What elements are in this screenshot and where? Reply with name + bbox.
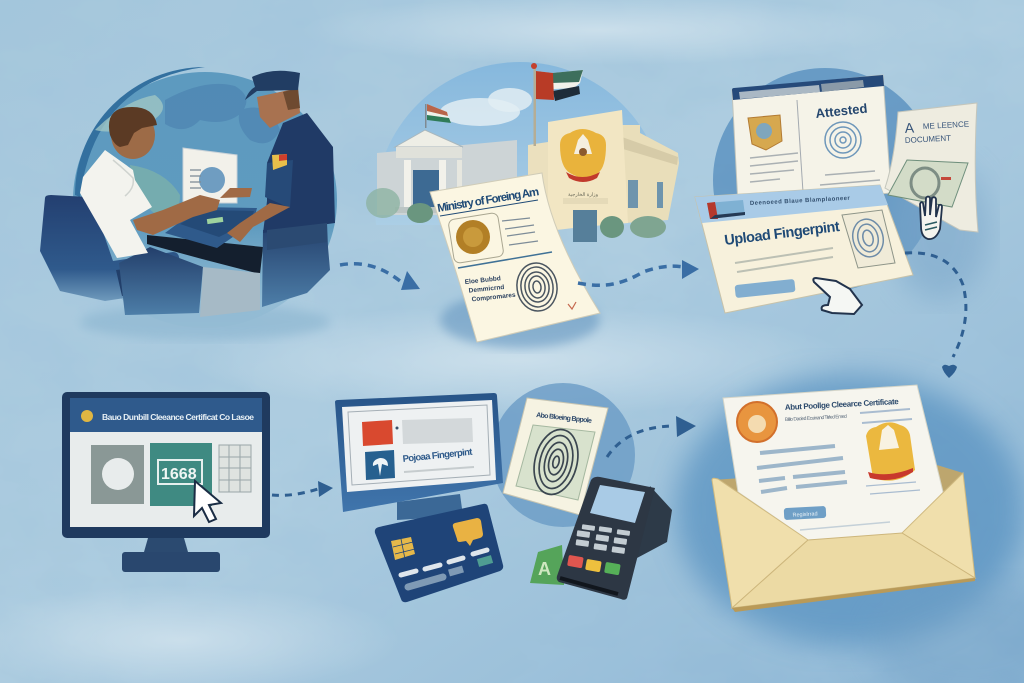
upload card: Deenoeed Blaue Blamplaoneer [750, 196, 851, 207]
orange seal [737, 402, 777, 442]
under-desk shadow [200, 267, 260, 317]
certificate: Biiilo Dacied Ecuinand Tiirled Emed [785, 414, 847, 423]
Indian flag [425, 104, 451, 128]
paper with fingerprint on stand [183, 148, 237, 203]
UAE flag and pole [531, 63, 583, 146]
envelope front [712, 473, 975, 612]
chip [391, 537, 415, 560]
seal box [448, 212, 504, 264]
fingerprint [514, 260, 560, 314]
classical building [377, 130, 517, 215]
flag [707, 200, 745, 219]
ministry building [528, 110, 679, 242]
document heading: Ministry of Foreing Am [437, 186, 540, 215]
stamp [825, 122, 861, 158]
licence document: DOCUMENT [905, 134, 951, 145]
globe backdrop [73, 67, 337, 340]
monitor stand [144, 538, 188, 552]
arrow: step 1 to step 2 [340, 264, 420, 290]
small caption: Eloe Bubbd [464, 275, 501, 286]
applicant [80, 107, 220, 258]
small caption: Compromares [471, 292, 516, 303]
applicant legs [119, 247, 203, 315]
monitor: clearance certificate portal [62, 392, 270, 572]
envelope with certificate [712, 385, 975, 612]
arrow: step 4 to step 5 [272, 481, 333, 497]
arrow: step 5 to step 6 [607, 416, 696, 457]
icon: pointing hand [813, 278, 862, 314]
fingerprint receipt [503, 398, 608, 515]
document: Ministry of Foreign Affairs attestation [430, 173, 600, 348]
fingerprint panel [842, 210, 895, 268]
licence document: A [904, 119, 915, 136]
sky circle [386, 62, 646, 176]
scene: attested licence documents [695, 68, 990, 314]
attested heading: Attested [815, 101, 868, 121]
certificate [723, 385, 945, 540]
licence document: ME LEENCE [923, 120, 969, 131]
emblem [748, 115, 782, 150]
letter A tile [530, 545, 564, 585]
ministry building: وزارة الخارجية [568, 192, 599, 198]
payment terminal [557, 477, 672, 600]
button [784, 506, 826, 520]
fingerprint receipt: Abo Bloeing Bppole [536, 412, 592, 425]
scene: applicant and police officer at fingerprint scanner [40, 67, 337, 340]
scene: government buildings with flags [366, 62, 679, 242]
attested window [732, 75, 891, 205]
envelope back [712, 465, 975, 608]
monitor: clearance certificate portal: 1668 [161, 466, 197, 483]
icon: raised hand [920, 196, 942, 239]
upload card [695, 185, 913, 313]
table [219, 445, 251, 492]
portal label: Pojoaa Fingerpint [402, 447, 474, 465]
arrow: step 2 to step 3 [578, 260, 699, 285]
icon: chat bubble [453, 518, 483, 546]
trees [366, 188, 666, 238]
small caption: Demmicrnd [468, 284, 505, 295]
upload heading: Upload Fingerpint [724, 219, 841, 249]
portal title: Bauo Dunbill Cleeance Certificat Co Lasoe [102, 412, 254, 422]
licence document [885, 103, 978, 232]
police officer [220, 71, 335, 307]
emblem [866, 422, 915, 481]
icon: cursor [194, 481, 221, 522]
desk [147, 235, 263, 274]
letter A tile: A [538, 559, 551, 579]
certificate title: Abut Poollge Cleearce Certificate [785, 397, 899, 412]
certificate: Regislrrad [792, 511, 818, 519]
monitor: police fingerprint page [335, 383, 635, 527]
credit card [375, 504, 503, 602]
emblem [560, 129, 606, 182]
chair [40, 195, 185, 301]
teal card [150, 443, 212, 506]
scanner [165, 207, 257, 248]
arrow: step 3 to step 4 [905, 253, 966, 378]
blue button [735, 279, 796, 298]
document lines [502, 218, 538, 245]
